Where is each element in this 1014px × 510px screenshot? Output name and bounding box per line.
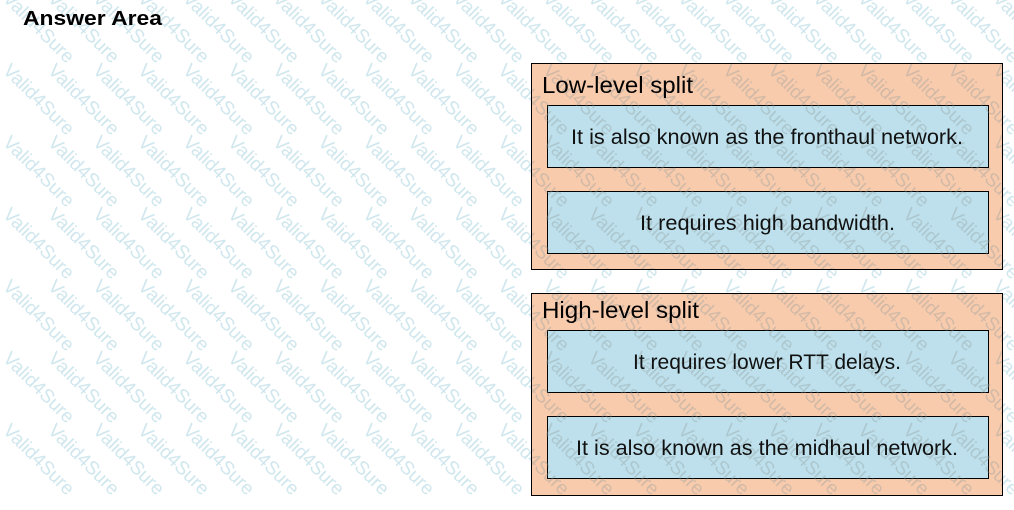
statement box: lower RTT delays	[548, 330, 988, 392]
statement box: midhaul network	[548, 416, 988, 478]
heading: high-level split: High-level split	[542, 297, 700, 323]
statement: lower RTT delays: It requires lower RTT delays.	[633, 351, 901, 374]
heading: low-level split: Low-level split	[542, 72, 694, 98]
panel watermark	[532, 64, 1002, 494]
statement: midhaul network: It is also known as the midhaul network.	[576, 437, 958, 460]
panel: high-level split	[532, 294, 1002, 496]
statement box: fronthaul network	[548, 106, 988, 168]
statement: high bandwidth: It requires high bandwidth.	[640, 212, 895, 235]
statement: fronthaul network: It is also known as the fronthaul network.	[571, 126, 963, 149]
panel: low-level split	[532, 64, 1002, 270]
title: Answer Area	[23, 8, 163, 30]
statement box: high bandwidth	[548, 192, 988, 254]
